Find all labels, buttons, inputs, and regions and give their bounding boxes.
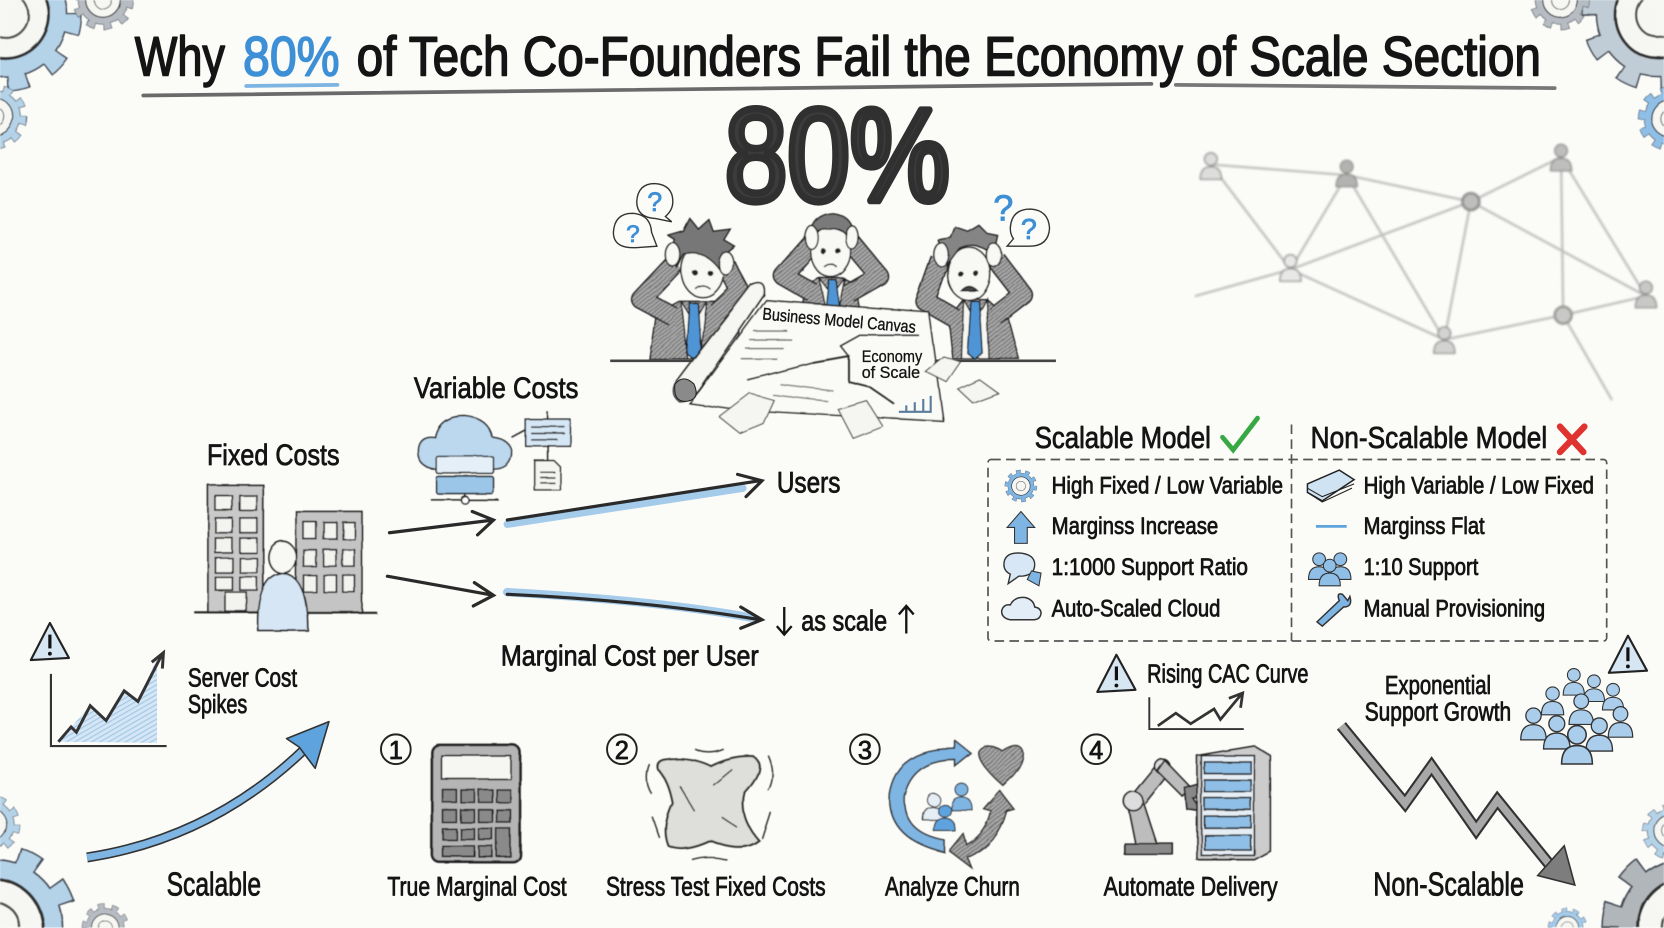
corner gears top-left: [0, 0, 130, 145]
icon: green check: [1223, 418, 1258, 450]
label: server cost spikes: Server Cost: [188, 665, 297, 693]
label: automate delivery: Automate Delivery: [1104, 872, 1278, 902]
step 4 number: 4: [1089, 737, 1103, 765]
canvas heading: Business Model Canvas: [762, 304, 917, 337]
question bubbles left: ?: [647, 187, 662, 217]
founder left: [641, 219, 743, 359]
question bubbles right: [993, 188, 1050, 246]
roll end: [675, 379, 696, 401]
arrow: fixed to users: [389, 512, 493, 535]
row: high variable: High Variable / Low Fixed: [1364, 472, 1594, 499]
label: non-scalable: Non-Scalable: [1373, 866, 1524, 903]
label: rising cac curve: Rising CAC Curve: [1147, 660, 1308, 688]
row: high fixed: High Fixed / Low Variable: [1052, 472, 1283, 499]
label: exponential support growth: Exponential: [1385, 672, 1491, 700]
row: support ratio: [1004, 553, 1248, 586]
comparison headers: Scalable Model: [1035, 420, 1211, 455]
canvas section label: Economy: [862, 347, 923, 366]
comparison headers: Non-Scalable Model: [1311, 420, 1547, 455]
question bubbles right: ?: [993, 188, 1013, 229]
row: high variable: [1307, 470, 1594, 502]
corner gears top-right: [1533, 0, 1664, 148]
mini chart: [899, 396, 932, 412]
corner gears bottom-left: [0, 798, 126, 928]
label: scalable: Scalable: [167, 866, 261, 903]
scalable column: [1002, 472, 1283, 623]
question bubbles left: [613, 184, 673, 248]
label: fixed costs: Fixed Costs: [207, 439, 340, 472]
row: manual provisioning: Manual Provisioning: [1364, 596, 1545, 623]
comparison headers: [1035, 420, 1547, 455]
arrow: scalable growth: [87, 722, 329, 857]
row: margins flat: Marginss Flat: [1364, 513, 1485, 540]
row: support: [1308, 553, 1478, 586]
label: users: Users: [777, 466, 840, 499]
label: stress test fixed costs: Stress Test Fixed Costs: [606, 872, 826, 902]
label: exponential support growth: Support Growth: [1365, 699, 1511, 727]
network diagram: [1195, 144, 1657, 400]
non-scalable column: [1307, 470, 1594, 626]
icon: churn cycle: [889, 741, 1023, 868]
icon: cloud servers and documents: [418, 412, 570, 504]
step 4 number: [1081, 734, 1111, 765]
corner gears bottom-right: [1550, 806, 1664, 928]
row: margins increase: Marginss Increase: [1052, 513, 1218, 540]
chart: server cost spikes: [51, 653, 167, 746]
label: server cost spikes: Spikes: [188, 691, 247, 719]
business model canvas torn document: [674, 283, 999, 438]
row: auto scaled cloud: Auto-Scaled Cloud: [1052, 596, 1220, 623]
step 3 number: 3: [858, 737, 872, 765]
label: marginal cost per user: Marginal Cost per User: [501, 640, 759, 672]
label: exponential support growth: [1365, 672, 1511, 727]
step 2 number: [607, 734, 637, 765]
row: support ratio: 1:1000 Support Ratio: [1052, 554, 1248, 581]
step 1 number: 1: [389, 737, 403, 765]
icon: calculator: [432, 745, 520, 862]
title: Why: [135, 25, 225, 87]
row: high fixed: [1007, 472, 1283, 500]
title underline: [143, 84, 1555, 96]
row: support: 1:10 Support: [1364, 554, 1478, 581]
step 1 number: [381, 734, 411, 765]
big 80 percent: 80%: [725, 82, 950, 229]
scroll roll: [674, 283, 764, 401]
row: manual provisioning: [1317, 594, 1545, 626]
warning icon: server cost: [31, 623, 69, 660]
step 2 number: 2: [615, 737, 629, 765]
icon: red cross: [1560, 427, 1584, 452]
comparison table frame: [988, 424, 1607, 641]
label: variable costs: Variable Costs: [414, 372, 578, 405]
icon: stress-tested squishy block: [647, 749, 773, 860]
founder right: [925, 225, 1023, 360]
arrow: users rising: [507, 474, 762, 524]
canvas section label: of Scale: [862, 363, 920, 382]
question bubbles right: ?: [1021, 214, 1037, 246]
canvas section label: [862, 347, 923, 382]
document lines and cracks: [741, 331, 919, 403]
title: 80%: [243, 25, 340, 87]
row: auto scaled cloud: [1002, 596, 1220, 623]
founder middle: [783, 213, 879, 310]
row: margins increase: [1007, 512, 1218, 543]
arrow: fixed to marginal cost: [387, 576, 493, 606]
warning icon: CAC: [1097, 655, 1136, 692]
step 3 number: [850, 734, 880, 765]
warning icon: support: [1609, 636, 1647, 673]
paper scraps: [720, 357, 999, 438]
question bubbles left: ?: [626, 221, 640, 248]
label: server cost spikes: [188, 665, 297, 719]
icon: robot arm and server rack: [1124, 746, 1270, 860]
arrow: marginal cost falling: [507, 592, 762, 628]
label: analyze churn: Analyze Churn: [885, 872, 1020, 902]
icon: crowd: [1521, 669, 1633, 764]
icon: buildings and person: [194, 485, 377, 630]
chart: rising cac: [1149, 693, 1244, 729]
label: as scale: as scale: [801, 605, 887, 637]
label: true marginal cost: True Marginal Cost: [387, 872, 567, 902]
table line: [610, 360, 1056, 362]
arrow: non-scalable zigzag: [1341, 726, 1575, 885]
